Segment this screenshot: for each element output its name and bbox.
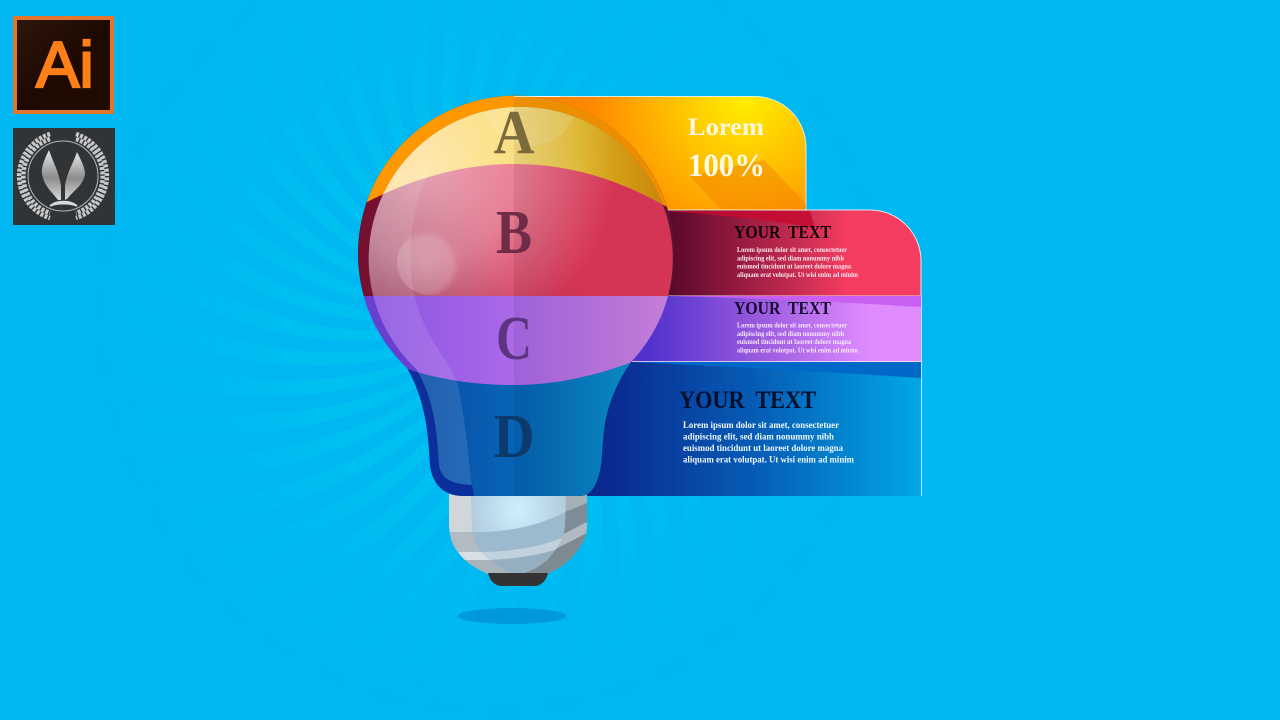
outer rim colours <box>350 90 690 500</box>
long shadow of figure <box>690 160 806 211</box>
inner glass colours <box>368 106 673 496</box>
swoosh C <box>668 296 921 307</box>
figure: 100%: 100% <box>688 148 765 184</box>
body text B: Lorem ipsum dolor sit amet, consectetuer <box>737 246 847 254</box>
left reflection strip <box>360 170 472 490</box>
screw cap <box>488 573 548 586</box>
body text C: euismod tincidunt ut laoreet dolore magna <box>737 338 851 346</box>
letter B: B <box>496 199 532 267</box>
body text C: adipiscing elit, sed diam nonummy nibh <box>737 330 844 338</box>
icon: Adobe Illustrator logo <box>15 18 112 112</box>
body text B: euismod tincidunt ut laoreet dolore magna <box>737 262 851 270</box>
panel: tab A Lorem 100% <box>514 96 806 212</box>
panel: tab D <box>585 362 922 496</box>
body text C <box>737 322 858 354</box>
swoosh B <box>668 211 815 228</box>
heading: Lorem: Lorem <box>688 114 764 141</box>
lamp base <box>449 494 587 586</box>
body text D <box>683 420 854 466</box>
glass highlight <box>368 106 604 296</box>
ground shadow <box>458 608 566 624</box>
body text B <box>737 246 858 279</box>
letter C: C <box>496 305 532 373</box>
top shine <box>484 107 574 146</box>
letter A: A <box>494 99 535 167</box>
heading B: YOUR TEXT <box>734 222 831 242</box>
body text D: euismod tincidunt ut laoreet dolore magna <box>683 443 843 454</box>
body text B: aliquam erat volutpat. Ut wisi enim ad minim <box>737 271 858 279</box>
icon: winged laurel emblem <box>13 128 115 225</box>
body text B: adipiscing elit, sed diam nonummy nibh <box>737 254 844 262</box>
body text C: Lorem ipsum dolor sit amet, consectetuer <box>737 322 847 330</box>
light bulb with sections A B C D <box>358 96 674 496</box>
heading D: YOUR TEXT <box>679 387 816 414</box>
panel: tab C <box>630 296 922 362</box>
body text D: adipiscing elit, sed diam nonummy nibh <box>683 432 835 442</box>
body text C: aliquam erat volutpat. Ut wisi enim ad minim <box>737 346 858 354</box>
heading C: YOUR TEXT <box>734 298 831 318</box>
glass orb <box>397 233 458 295</box>
swirl rays <box>300 160 449 506</box>
icon: Adobe Illustrator logo: Ai <box>36 28 94 101</box>
letter D: D <box>494 403 534 471</box>
panel: tab B <box>650 210 921 296</box>
body text D: Lorem ipsum dolor sit amet, consectetuer <box>683 420 840 431</box>
body text D: aliquam erat volutpat. Ut wisi enim ad minim <box>683 454 854 466</box>
right half shade <box>514 96 674 496</box>
swoosh D <box>632 362 921 378</box>
